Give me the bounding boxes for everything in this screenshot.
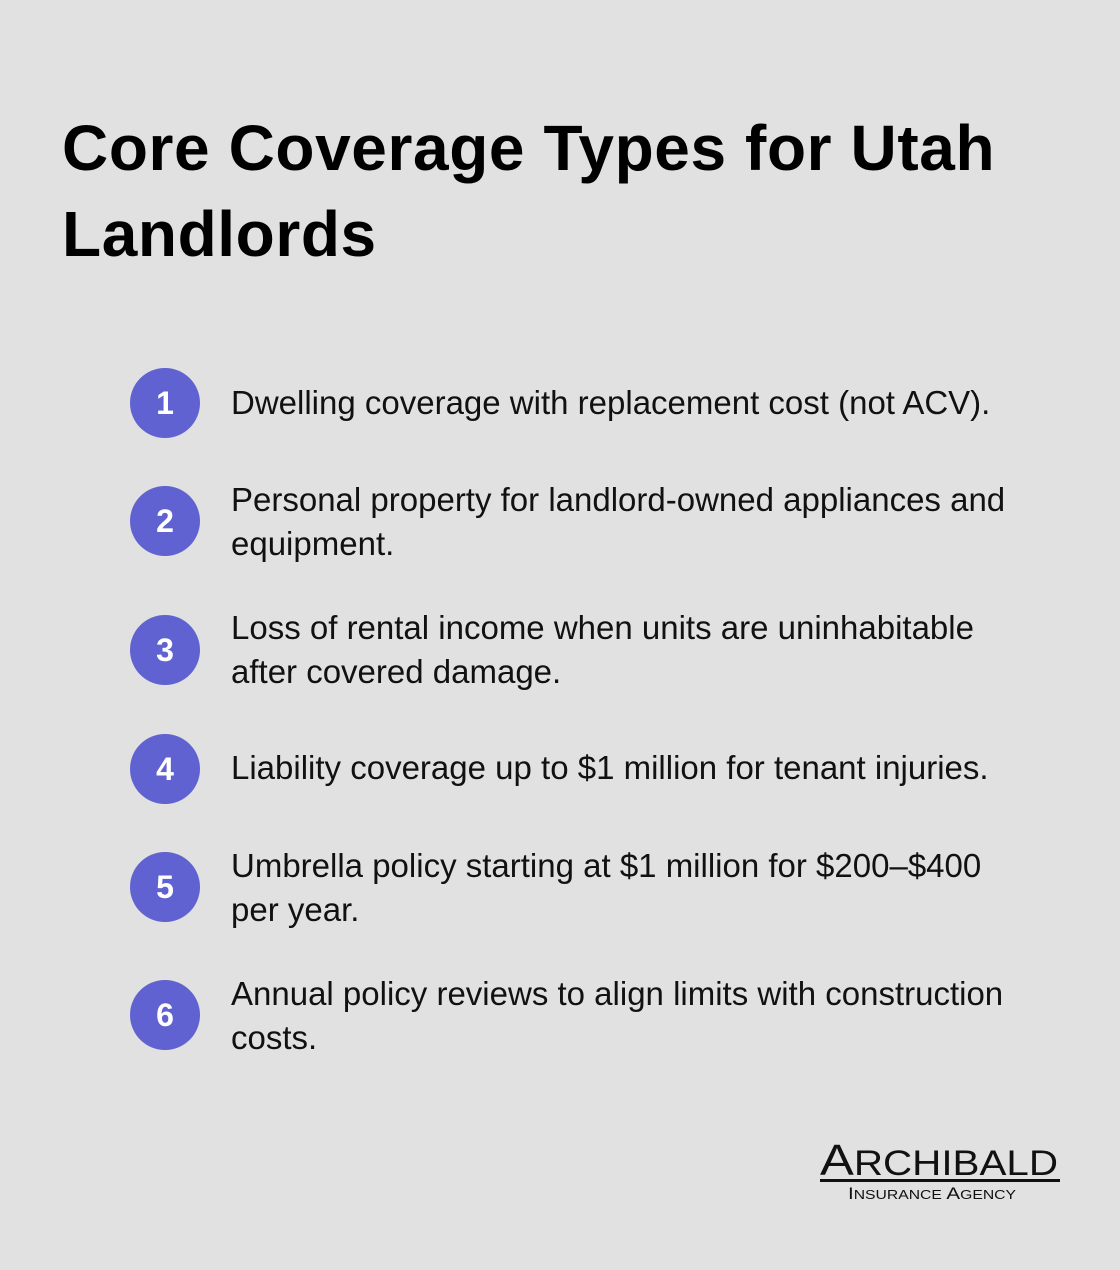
badge 1	[130, 368, 200, 438]
item 6	[130, 975, 1003, 1056]
item 4	[130, 734, 989, 804]
badge 6	[130, 980, 200, 1050]
badge 6: 6	[156, 997, 174, 1033]
logo: INSURANCE AGENCY	[848, 1184, 1016, 1203]
badge 4	[130, 734, 200, 804]
badge 2: 2	[156, 503, 174, 539]
text 1: Dwelling coverage with replacement cost (not ACV).	[231, 384, 990, 421]
title: Core Coverage Types for Utah	[62, 112, 995, 184]
text 4: Liability coverage up to $1 million for tenant injuries.	[231, 749, 989, 786]
logo	[820, 1136, 1060, 1203]
item 5	[130, 847, 981, 928]
badge 2	[130, 486, 200, 556]
text 5: per year.	[231, 891, 359, 928]
text 6	[231, 975, 1003, 1056]
item 2	[130, 481, 1005, 562]
text 6: costs.	[231, 1019, 317, 1056]
badge 3: 3	[156, 632, 174, 668]
text 3: after covered damage.	[231, 653, 561, 690]
text 6: Annual policy reviews to align limits with construction	[231, 975, 1003, 1012]
badge 3	[130, 615, 200, 685]
text 3: Loss of rental income when units are uninhabitable	[231, 609, 974, 646]
text 2: equipment.	[231, 525, 394, 562]
text 5: Umbrella policy starting at $1 million for $200–$400	[231, 847, 981, 884]
text 3	[231, 609, 974, 690]
badge 5: 5	[156, 869, 174, 905]
item 3	[130, 609, 974, 690]
logo: ARCHIBALD	[820, 1136, 1058, 1185]
badge 4: 4	[156, 751, 174, 787]
text 2	[231, 481, 1005, 562]
text 5	[231, 847, 981, 928]
badge 5	[130, 852, 200, 922]
item 1	[130, 368, 990, 438]
text 2: Personal property for landlord-owned appliances and	[231, 481, 1005, 518]
title: Landlords	[62, 198, 377, 270]
badge 1: 1	[156, 385, 174, 421]
title	[62, 112, 995, 270]
